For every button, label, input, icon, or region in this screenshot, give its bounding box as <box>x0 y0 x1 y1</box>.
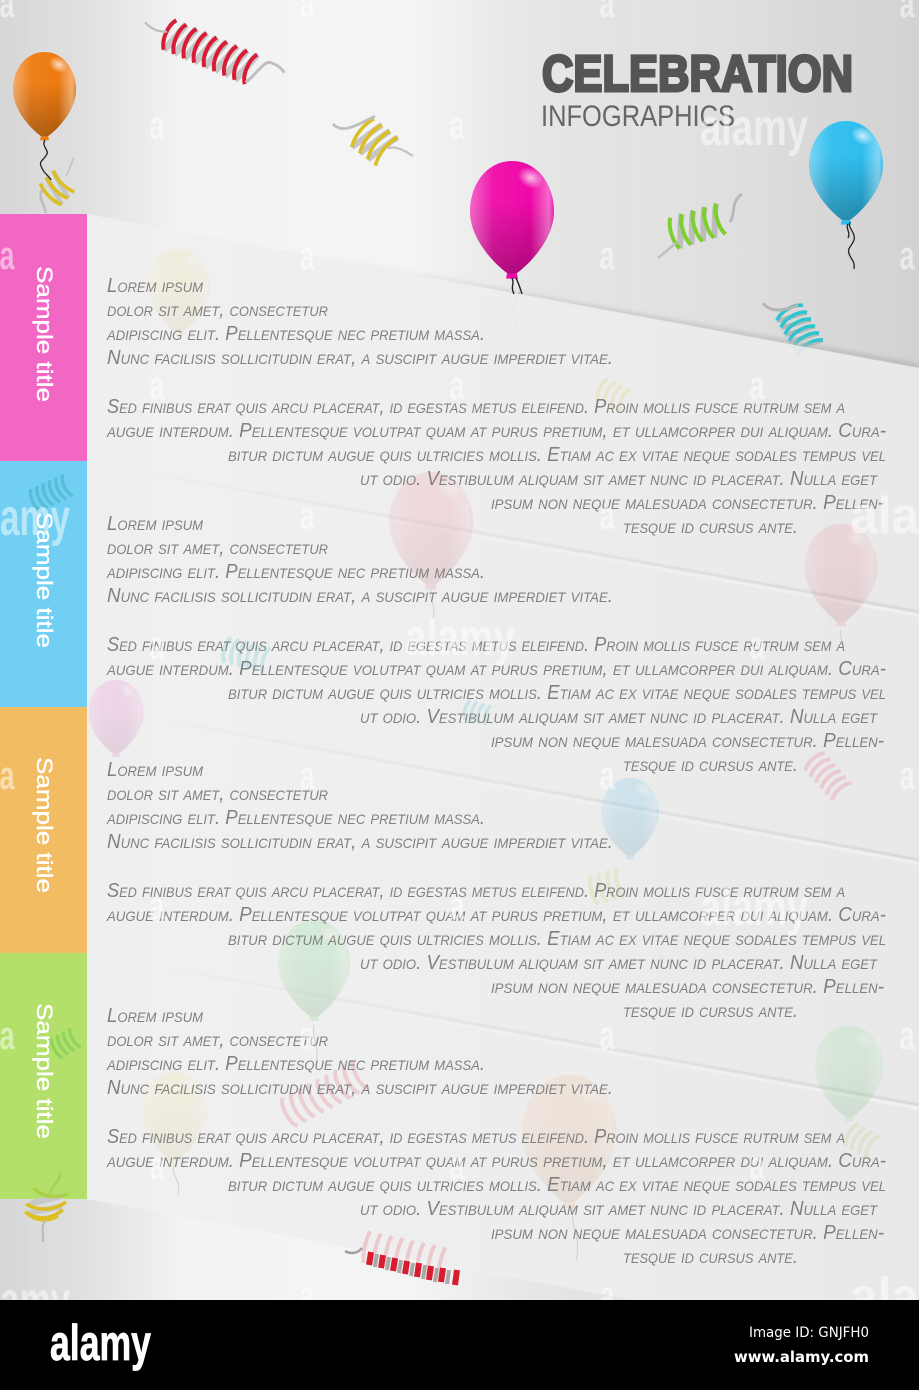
text block 3: ipsum non neque malesuada consectetur. Pellen- <box>491 976 884 998</box>
text block 4: tesque id cursus ante. <box>623 1246 798 1268</box>
sheet fill <box>87 214 919 1353</box>
tab: blue <box>0 461 87 707</box>
text block 3: tesque id cursus ante. <box>623 1000 798 1022</box>
text block 1: dolor sit amet, consectetur <box>107 299 328 321</box>
watermark: repeated letters: a <box>450 364 465 408</box>
streamer: red top <box>138 9 287 97</box>
text block 1: augue interdum. Pellentesque volutpat quam at purus pretium, et ullamcorper dui aliquam. Cura- <box>106 420 886 442</box>
text block 4: Sed finibus erat quis arcu placerat, id egestas metus eleifend. Proin mollis fusce rutrum sem a <box>107 1126 845 1148</box>
text block 2 <box>106 513 886 776</box>
text block 4: bitur dictum augue quis ultricies mollis. Etiam ac ex vitae neque sodales tempus vel <box>228 1174 886 1196</box>
text block 3: ut odio. Vestibulum aliquam sit amet nunc id placerat. Nulla eget <box>360 952 878 974</box>
balloon: magenta <box>470 161 554 294</box>
streamer on blue tab <box>28 474 73 512</box>
faded streamer: yellow <box>595 378 630 411</box>
watermark: repeated letters: a <box>150 624 165 668</box>
faded streamer: red large <box>279 1060 368 1128</box>
vertical background bands <box>27 0 772 1300</box>
faded streamer: pink <box>803 751 851 800</box>
text block 3: Lorem ipsum <box>107 759 203 781</box>
text block 4: augue interdum. Pellentesque volutpat quam at purus pretium, et ullamcorper dui aliquam. Cura- <box>106 1150 886 1172</box>
streamer: green <box>658 194 742 258</box>
text block 1: Lorem ipsum <box>107 275 203 297</box>
watermark: repeated letters: a <box>600 1274 615 1318</box>
subtitle: INFOGRAPHICS: INFOGRAPHICS <box>541 100 735 133</box>
text block 4: Nunc facilisis sollicitudin erat, a suscipit augue imperdiet vitae. <box>107 1077 613 1099</box>
text block 3: augue interdum. Pellentesque volutpat quam at purus pretium, et ullamcorper dui aliquam. Cura- <box>106 904 886 926</box>
faded balloon: green right <box>815 1026 883 1121</box>
text block 1: Sed finibus erat quis arcu placerat, id egestas metus eleifend. Proin mollis fusce rutrum sem a <box>107 396 845 418</box>
text block 2: ipsum non neque malesuada consectetur. Pellen- <box>491 730 884 752</box>
faded upper half <box>361 1231 446 1279</box>
title: CELEBRATION: CELEBRATION <box>542 45 853 102</box>
tab label: orange: Sample title <box>32 757 57 893</box>
faded streamer: teal <box>221 636 270 673</box>
tab: orange <box>0 707 87 953</box>
text block 2: tesque id cursus ante. <box>623 754 798 776</box>
visible red stubs <box>369 1252 457 1285</box>
watermark: repeated letters: a <box>600 234 615 278</box>
color sidebar <box>0 214 87 1199</box>
top edge shadow <box>320 258 919 366</box>
text block 2: Nunc facilisis sollicitudin erat, a suscipit augue imperdiet vitae. <box>107 585 613 607</box>
text block 1: adipiscing elit. Pellentesque nec pretium massa. <box>106 323 485 345</box>
text block 3: bitur dictum augue quis ultricies mollis. Etiam ac ex vitae neque sodales tempus vel <box>228 928 886 950</box>
balloon string: magenta lower part <box>514 292 520 330</box>
faded balloon: magenta <box>88 680 144 757</box>
text block 4: Lorem ipsum <box>107 1005 203 1027</box>
text block 3: adipiscing elit. Pellentesque nec pretium massa. <box>106 807 485 829</box>
text block 1: ut odio. Vestibulum aliquam sit amet nunc id placerat. Nulla eget <box>360 468 878 490</box>
fold line 2 <box>130 470 919 615</box>
faded balloon: green <box>278 920 350 1021</box>
streamer: yellow-green below green tab <box>25 1172 68 1242</box>
faded streamer: yellow lower <box>587 869 625 905</box>
text block 4: ut odio. Vestibulum aliquam sit amet nunc id placerat. Nulla eget <box>360 1198 878 1220</box>
text block 4 <box>106 1005 886 1268</box>
faded balloon: red <box>389 472 473 590</box>
watermark: repeated letters: a <box>150 884 165 928</box>
text block 4: ipsum non neque malesuada consectetur. Pellen- <box>491 1222 884 1244</box>
watermark: alamy wordmarks: amy <box>0 1272 70 1330</box>
text block 2: dolor sit amet, consectetur <box>107 537 328 559</box>
tab label: green: Sample title <box>32 1003 57 1139</box>
text block 4: dolor sit amet, consectetur <box>107 1029 328 1051</box>
footer logo: alamy <box>50 1315 151 1371</box>
text block 1: tesque id cursus ante. <box>623 516 798 538</box>
watermark: repeated letters: a <box>150 104 165 148</box>
panels: four overlapping diagonal sheets <box>87 214 919 1353</box>
watermark: repeated letters: a <box>450 884 465 928</box>
streamer: yellow top-left <box>38 158 74 213</box>
watermark: repeated letters: a <box>600 1014 615 1058</box>
visible grey stubs <box>375 1254 449 1284</box>
watermark: repeated letters: a <box>750 1144 765 1188</box>
faded balloon: yellow lower <box>141 1072 207 1164</box>
watermark: repeated letters: a <box>450 104 465 148</box>
watermark: alamy wordmarks: alamy <box>700 99 808 157</box>
text block 2: Sed finibus erat quis arcu placerat, id egestas metus eleifend. Proin mollis fusce rutrum sem a <box>107 634 845 656</box>
tab label: pink: Sample title <box>32 266 57 402</box>
watermark: repeated letters: a <box>300 754 315 798</box>
footer image id: Image ID: GNJFH0 <box>749 1325 869 1341</box>
watermark: repeated letters: a <box>300 1014 315 1058</box>
faded balloon: red right <box>804 524 878 626</box>
text block 3: Sed finibus erat quis arcu placerat, id egestas metus eleifend. Proin mollis fusce rutrum sem a <box>107 880 845 902</box>
streamer: teal, behind panel edge <box>763 302 823 355</box>
watermark: alamy wordmarks: amy <box>0 489 70 547</box>
footer bar <box>0 1300 919 1390</box>
balloon: blue <box>809 121 883 269</box>
watermark: repeated letters: a <box>450 1144 465 1188</box>
text block 1 <box>106 275 886 538</box>
faded balloon strings <box>173 590 843 1260</box>
text block 1: ipsum non neque malesuada consectetur. Pellen- <box>491 492 884 514</box>
watermark: repeated letters: a <box>300 494 315 538</box>
watermark: repeated letters: a <box>0 1014 15 1058</box>
faded balloon: blue <box>601 778 659 859</box>
watermark: repeated letters: a <box>300 234 315 278</box>
watermark: repeated letters: a <box>150 1144 165 1188</box>
streamer: red bottom <box>345 1231 457 1285</box>
text block 3: dolor sit amet, consectetur <box>107 783 328 805</box>
watermark: repeated letters: a <box>600 754 615 798</box>
faded streamer: teal small <box>463 700 491 725</box>
watermark: repeated letters: a <box>150 364 165 408</box>
text block 4: adipiscing elit. Pellentesque nec pretium massa. <box>106 1053 485 1075</box>
text block 2: adipiscing elit. Pellentesque nec pretium massa. <box>106 561 485 583</box>
tab: pink <box>0 214 87 461</box>
watermark: repeated letters: a <box>750 624 765 668</box>
faded streamer: green right <box>842 1122 879 1158</box>
fold line 4 <box>150 965 919 1108</box>
text block 1: Nunc facilisis sollicitudin erat, a suscipit augue imperdiet vitae. <box>107 347 613 369</box>
watermark: repeated letters: a <box>750 364 765 408</box>
watermark: alamy wordmarks: alamy <box>405 609 515 667</box>
fold line 3 <box>150 718 919 863</box>
watermark: repeated letters: a <box>0 754 15 798</box>
text block 2: Lorem ipsum <box>107 513 203 535</box>
streamer: yellow middle <box>333 116 413 166</box>
watermark: alamy wordmarks: alamy <box>700 879 808 937</box>
text block 2: ut odio. Vestibulum aliquam sit amet nunc id placerat. Nulla eget <box>360 706 878 728</box>
text block 2: bitur dictum augue quis ultricies mollis. Etiam ac ex vitae neque sodales tempus vel <box>228 682 886 704</box>
tab: green <box>0 953 87 1199</box>
footer url: www.alamy.com <box>734 1348 869 1366</box>
tab label: blue: Sample title <box>32 512 57 648</box>
watermark: repeated letters: a <box>300 1274 315 1318</box>
text block 3 <box>106 759 886 1022</box>
faded background balloons <box>88 249 883 1260</box>
text block 3: Nunc facilisis sollicitudin erat, a suscipit augue imperdiet vitae. <box>107 831 613 853</box>
faded streamers <box>221 378 879 1158</box>
faded balloon: orange <box>522 1075 616 1208</box>
streamer on green tab <box>49 1028 81 1059</box>
watermark: repeated letters: a <box>0 234 15 278</box>
balloon: orange <box>13 52 76 180</box>
text block 2: augue interdum. Pellentesque volutpat quam at purus pretium, et ullamcorper dui aliquam. Cura- <box>106 658 886 680</box>
text block 1: bitur dictum augue quis ultricies mollis. Etiam ac ex vitae neque sodales tempus vel <box>228 444 886 466</box>
watermark: repeated letters: a <box>600 494 615 538</box>
faded balloon: yellow <box>148 249 210 336</box>
